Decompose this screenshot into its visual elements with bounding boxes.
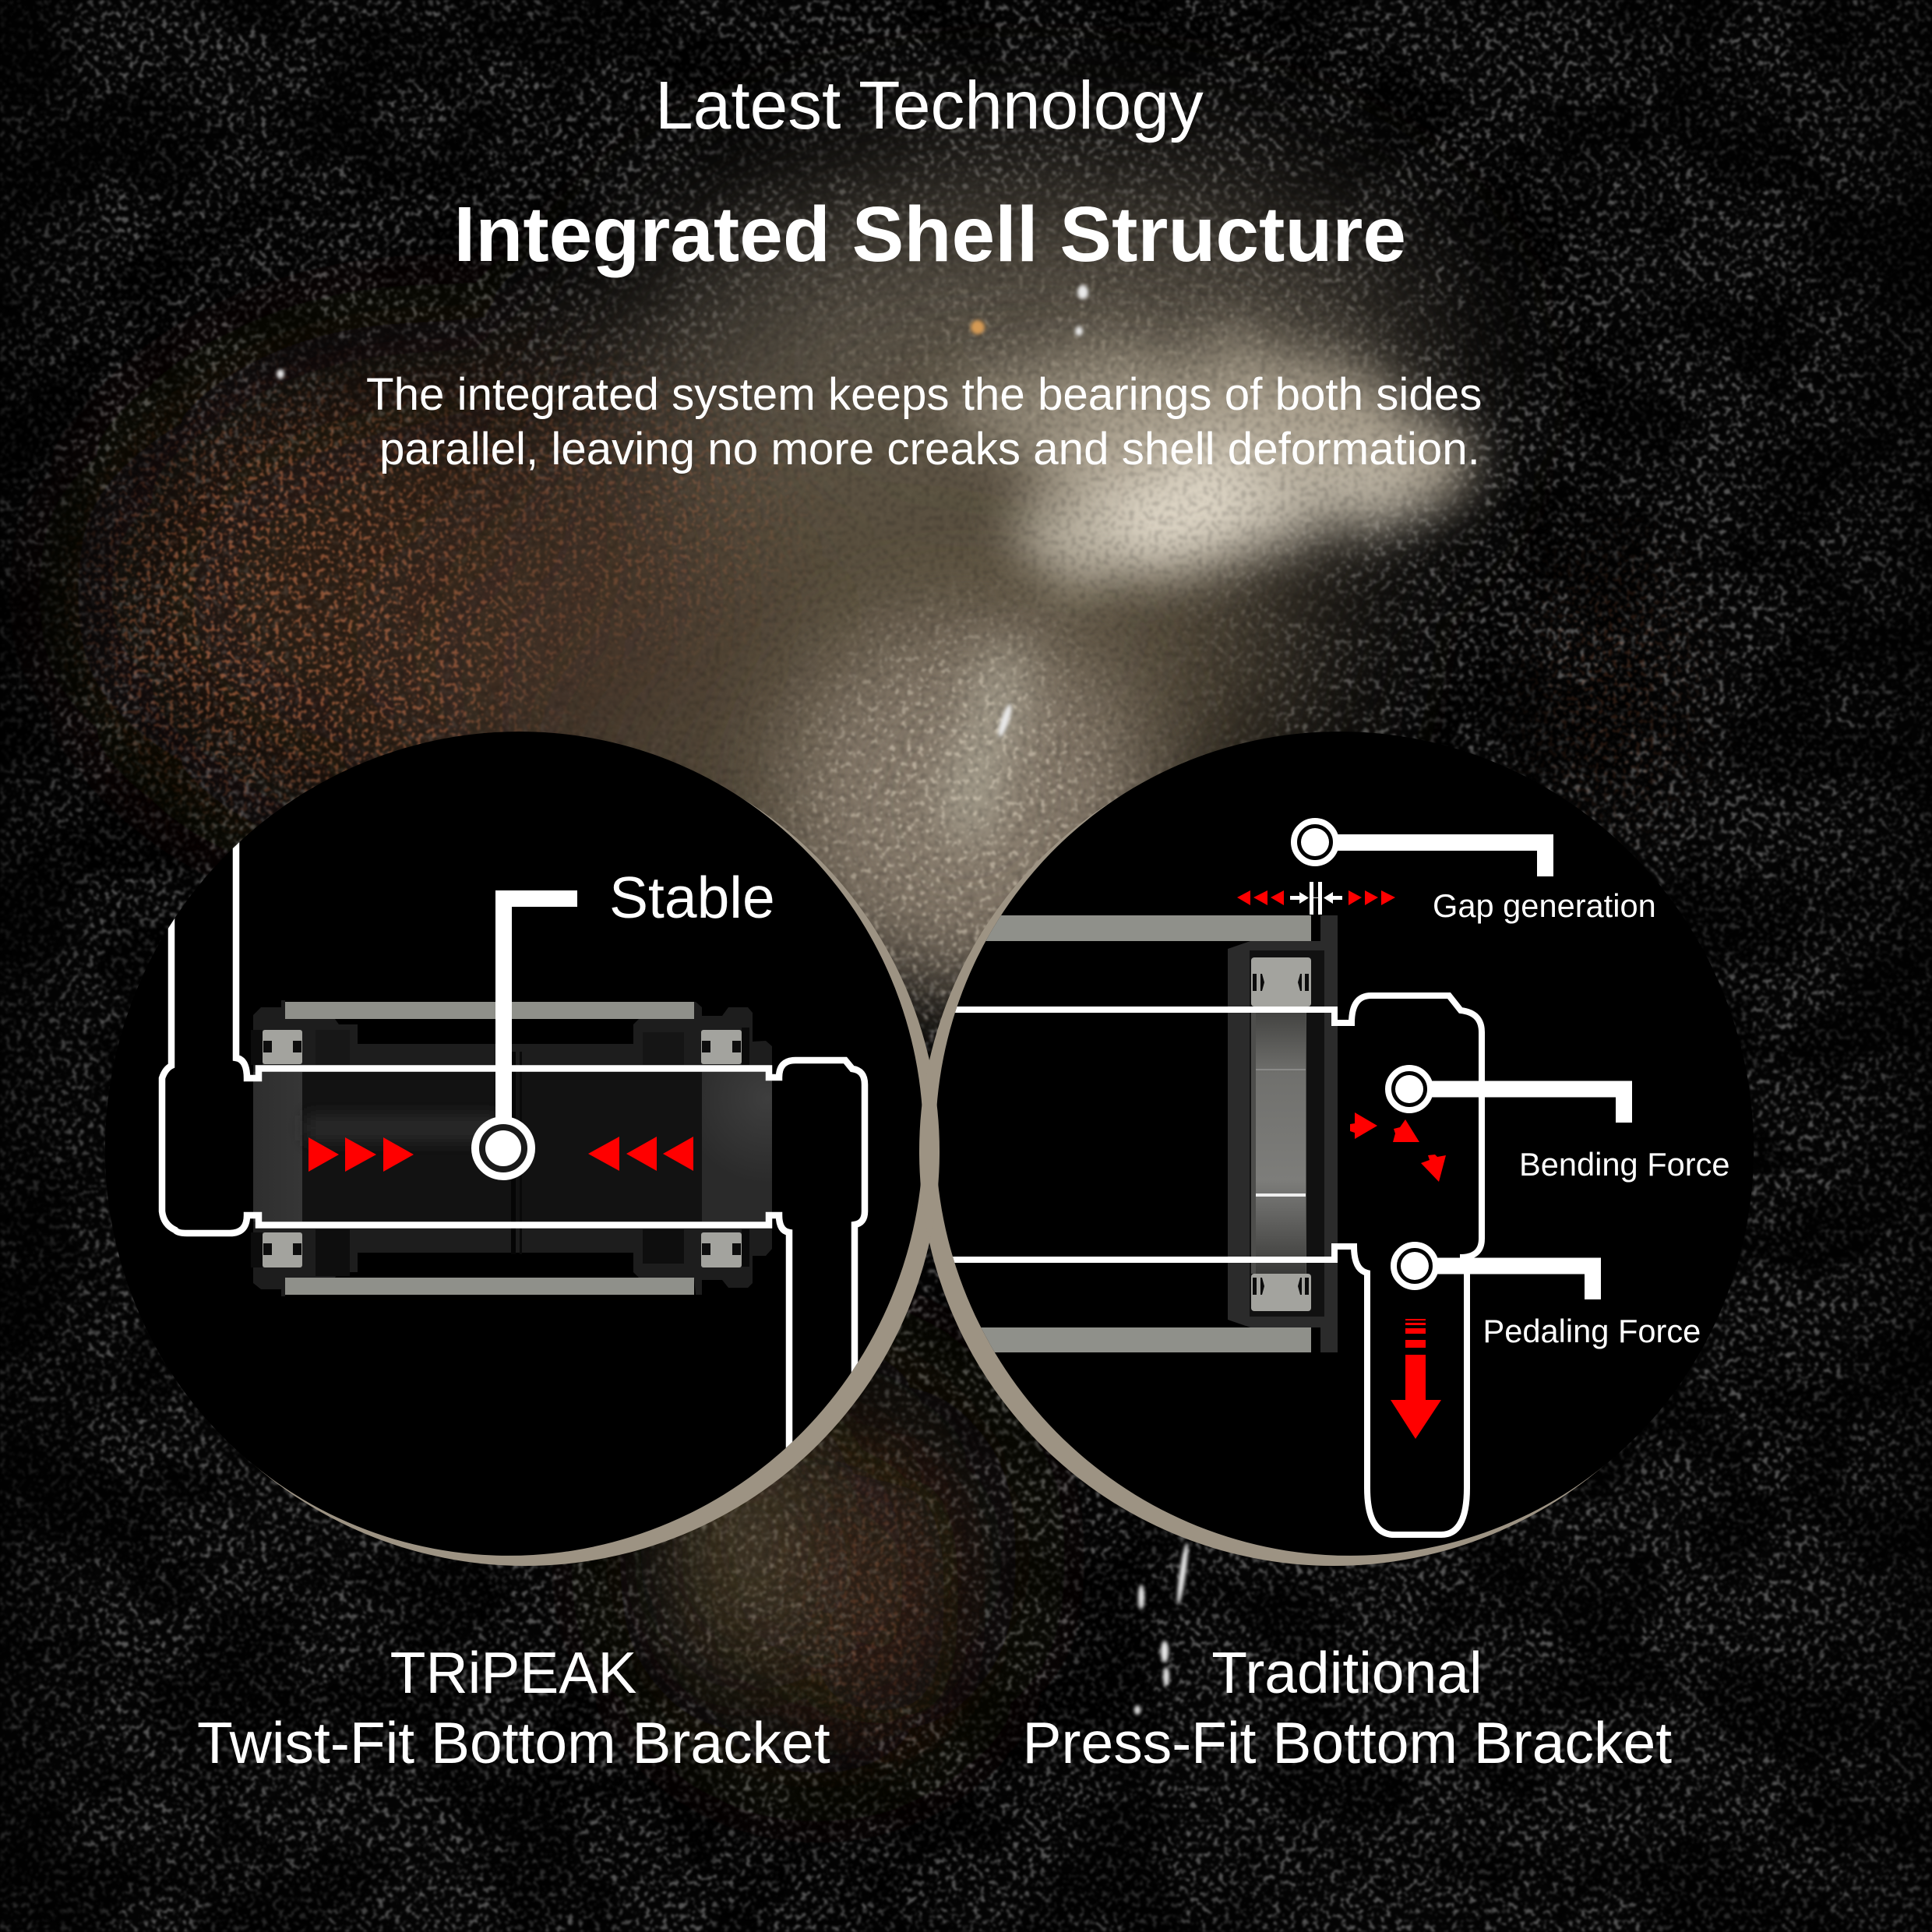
bearing blocks xyxy=(1251,957,1311,1311)
sparkle highlights xyxy=(277,285,1190,1715)
callout: bending force xyxy=(1388,1068,1624,1123)
red bending arrows xyxy=(1350,1112,1446,1182)
gap generation marker xyxy=(1237,882,1395,915)
callout: pedaling force xyxy=(1394,1245,1592,1299)
gray shell bars xyxy=(285,1002,694,1295)
description text: parallel, leaving no more creaks and shell deformation. xyxy=(379,424,1480,474)
description text xyxy=(366,369,1482,474)
cup housing xyxy=(1228,915,1338,1352)
tan crescent behind left disk xyxy=(111,737,940,1566)
white frame outline xyxy=(162,779,865,1558)
caption: Traditional: Press-Fit Bottom Bracket xyxy=(1022,1710,1672,1775)
bearings xyxy=(263,1030,742,1267)
caption: TRiPEAK xyxy=(197,1640,830,1775)
caption: TRiPEAK: Twist-Fit Bottom Bracket xyxy=(197,1710,830,1775)
gray shell bars xyxy=(896,915,1311,1352)
label: pedaling force: Pedaling Force xyxy=(1483,1313,1701,1349)
bottom bracket cross-section xyxy=(159,842,868,1448)
title: Latest Technology xyxy=(655,67,1204,143)
white frame outline xyxy=(896,996,1482,1535)
callout: gap generation xyxy=(1294,821,1546,876)
press-fit cross-section xyxy=(896,915,1482,1535)
black disk right xyxy=(783,580,1906,1708)
panel: TRiPEAK twist-fit bracket xyxy=(0,580,1076,1708)
caption: TRiPEAK: TRiPEAK xyxy=(390,1640,636,1705)
label: gap generation: Gap generation xyxy=(1433,887,1656,924)
heading: Integrated Shell Structure xyxy=(453,191,1406,278)
callout: stable xyxy=(475,899,577,1176)
description text: The integrated system keeps the bearings of both sides xyxy=(366,369,1482,420)
red pedaling arrow xyxy=(1391,1319,1441,1439)
caption: Traditional: Traditional xyxy=(1211,1640,1482,1705)
caption: Traditional xyxy=(1022,1640,1672,1775)
label: Stable: Stable xyxy=(609,865,775,930)
label: bending force: Bending Force xyxy=(1519,1146,1730,1183)
red arrows pointing inward xyxy=(308,1137,693,1172)
tan crossing between the disks xyxy=(111,737,940,1566)
tan crescent behind right disk xyxy=(919,737,1748,1566)
panel: traditional press-fit bracket xyxy=(111,580,1906,1708)
black disk left xyxy=(0,580,1076,1708)
